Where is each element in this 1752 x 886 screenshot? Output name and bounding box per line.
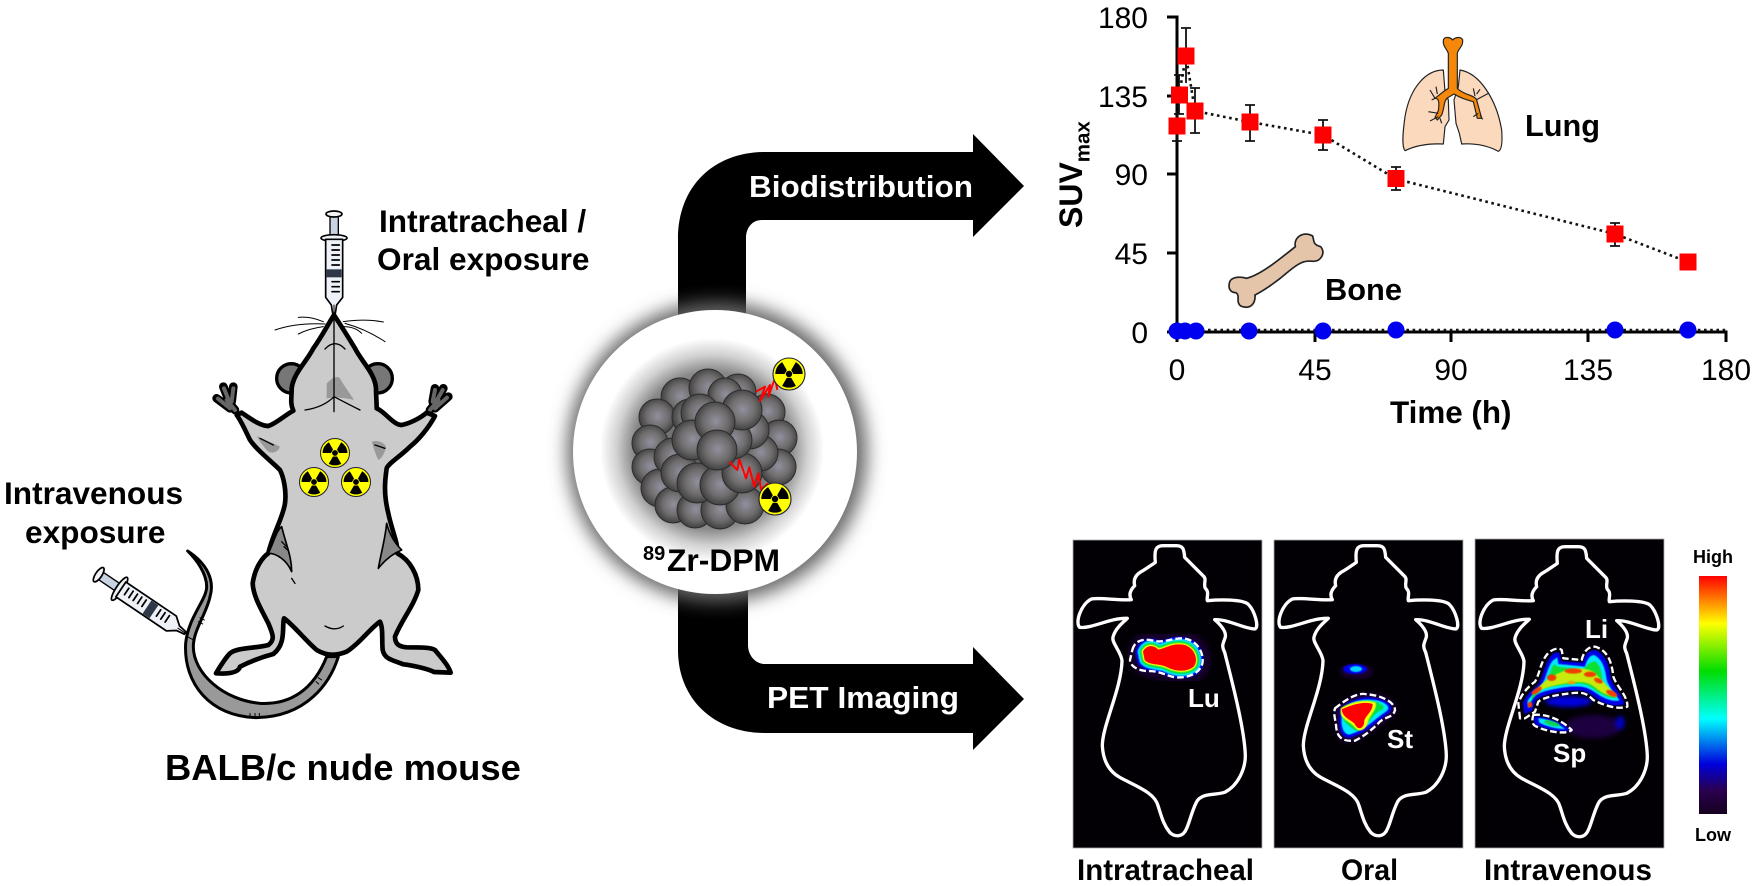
- icon: red linkers: [729, 378, 777, 489]
- panel: PET intravenous: [1475, 539, 1664, 848]
- mouse left paw: [217, 387, 235, 410]
- y tick labels: 45: [1115, 238, 1148, 271]
- label: intratracheal oral exposure: [377, 203, 589, 277]
- series: bone markers: [1168, 322, 1696, 340]
- label: PET imaging: PET Imaging: [767, 680, 959, 715]
- series: bone line: [1177, 329, 1726, 331]
- panel: PET intratracheal: [1073, 540, 1262, 848]
- label: high: High: [1693, 547, 1733, 567]
- label: St: St: [1387, 724, 1413, 754]
- icon: particle cluster: [632, 369, 797, 529]
- label: Li: Li: [1585, 614, 1608, 644]
- series: lung markers: [1168, 48, 1696, 270]
- label: intratracheal oral exposure: Oral exposure: [377, 241, 589, 277]
- panel: mouse illustration: [4, 203, 589, 788]
- x tick labels: 45: [1298, 354, 1332, 387]
- mouse body: [216, 315, 451, 674]
- label: biodistribution: Biodistribution: [749, 169, 973, 204]
- y tick labels: 180: [1098, 2, 1148, 35]
- mouse right paw: [430, 388, 448, 410]
- body outline: [1078, 546, 1257, 836]
- color scale legend: [1693, 547, 1733, 845]
- mouse shading and anatomy: [257, 317, 402, 629]
- color bar: [1699, 576, 1727, 814]
- label: low: Low: [1695, 825, 1732, 845]
- label: Lu: Lu: [1188, 683, 1220, 713]
- white disc: [573, 310, 857, 594]
- circle shadow: [567, 302, 867, 602]
- body outline: [1480, 547, 1659, 837]
- arrow: to biodistribution: [678, 134, 1024, 340]
- panel: 89Zr-DPM nanoparticle: [567, 302, 867, 602]
- label: BALB/c nude mouse: BALB/c nude mouse: [165, 747, 521, 788]
- icon: lungs: [1403, 37, 1502, 151]
- label: intratracheal oral exposure: Intratracheal /: [379, 203, 586, 239]
- y tick labels: [1098, 2, 1148, 350]
- label: lung: Lung: [1525, 108, 1600, 143]
- x tick labels: 135: [1563, 354, 1613, 387]
- icon: radiation trio on mouse: [300, 438, 370, 496]
- x axis title: Time (h): [1390, 395, 1512, 430]
- captions: PET routes: [1077, 854, 1652, 886]
- y axis title: max: [1072, 121, 1094, 162]
- icon: radiation labels on particle: [759, 358, 805, 515]
- error bars: [1172, 28, 1620, 246]
- icon: tail syringe: [88, 562, 196, 646]
- label: intravenous exposure: Intravenous: [4, 475, 183, 511]
- x tick labels: 90: [1434, 354, 1468, 387]
- mouse tail: [186, 551, 338, 718]
- label: Sp: Sp: [1553, 738, 1586, 768]
- y tick labels: 135: [1098, 81, 1148, 114]
- label: 89Zr-DPM: 89: [643, 543, 665, 565]
- cluster halo: [600, 338, 824, 562]
- x tick labels: 180: [1701, 354, 1751, 387]
- lung signal: [1130, 638, 1203, 677]
- panel: SUVmax chart: [1053, 2, 1751, 430]
- series: lung line: [1177, 56, 1688, 262]
- stomach signal: [1334, 664, 1395, 741]
- mouse ears: [277, 364, 392, 393]
- label: 89Zr-DPM: Zr-DPM: [667, 542, 780, 578]
- x tick labels: [1169, 354, 1751, 387]
- icon: bone: [1229, 234, 1323, 307]
- y axis title: SUV: [1053, 162, 1089, 228]
- y tick labels: 0: [1131, 317, 1148, 350]
- label: intravenous exposure: [4, 475, 183, 550]
- image background: [1274, 540, 1463, 848]
- image background: [1073, 540, 1262, 848]
- panel: PET oral: [1274, 540, 1463, 848]
- x tick labels: 0: [1169, 354, 1185, 387]
- icon: top syringe: [321, 211, 347, 317]
- mouse drawing: [88, 211, 451, 718]
- arrow: to PET imaging: [678, 570, 1024, 750]
- y tick labels: 90: [1115, 159, 1148, 192]
- liver and spleen signal: [1518, 647, 1627, 738]
- body outline: [1279, 546, 1458, 836]
- image background: [1475, 539, 1664, 848]
- axes: [1167, 17, 1726, 342]
- label: bone: Bone: [1325, 272, 1402, 307]
- label: intravenous exposure: exposure: [25, 514, 165, 550]
